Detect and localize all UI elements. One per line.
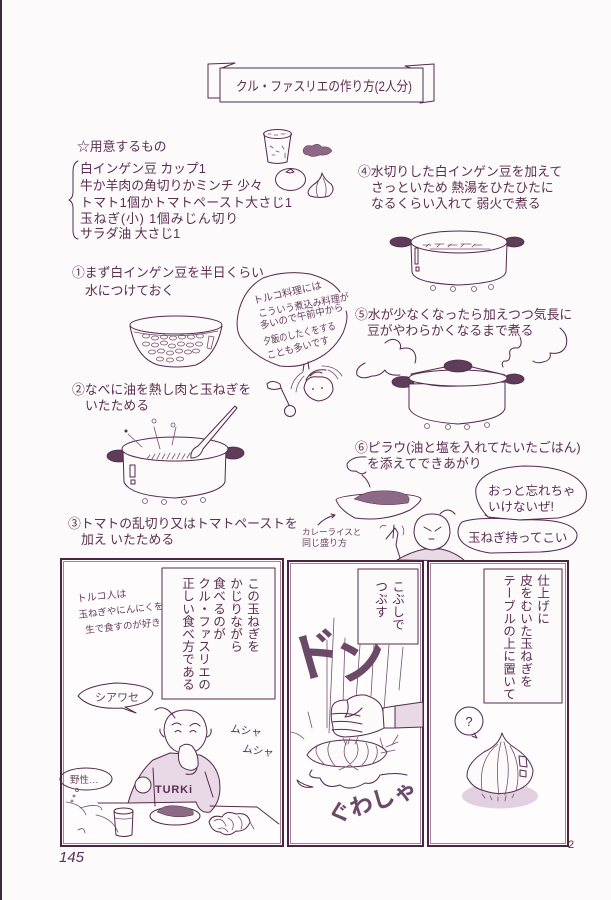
plate of food	[150, 806, 200, 825]
peeled onion	[467, 733, 533, 801]
ingredients heading: ☆用意するもの	[77, 139, 167, 154]
illustration: steam above pilaf	[347, 457, 370, 487]
speech bubble: forgot something: おっと忘れちゃ	[488, 484, 576, 498]
speech bubble: forgot something	[476, 466, 586, 520]
speech bubble: cooking note: こういう煮込み料理が	[257, 290, 350, 320]
caption box: panel 3: 仕上げに	[535, 574, 549, 625]
icon: onion	[308, 173, 333, 198]
step 1 text: ①まず白インゲン豆を半日くらい	[72, 265, 264, 280]
sfx: munch: ムシャ	[242, 743, 274, 759]
illustration: covered pot	[392, 360, 524, 430]
step 6 text: ⑥ピラウ(油と塩を入れてたいたごはん)	[355, 440, 581, 455]
step 3 text	[68, 516, 298, 547]
ingredient list with brace: 玉ねぎ(小) 1個みじん切り	[80, 211, 238, 226]
step 1 text	[72, 265, 264, 298]
step 6 text: を添えてできあがり	[367, 456, 482, 471]
sfx: munch	[230, 723, 274, 759]
illustration: stir-fry pot	[107, 406, 244, 504]
glass of water	[114, 808, 133, 836]
speech bubble: cooking note: トルコ料理には	[252, 279, 323, 307]
bubble: shiawase	[78, 683, 153, 713]
title banner	[208, 63, 434, 103]
question bubble: ?	[465, 714, 473, 729]
caption box: panel 3	[484, 569, 562, 703]
character: man pointing finger	[380, 510, 465, 561]
title banner: クル・ファスリエの作り方(2人分)	[236, 79, 412, 94]
step 3 text: 加え いたためる	[81, 532, 174, 547]
speech bubble: cooking note	[237, 273, 350, 371]
caption box: panel 1: クル・ファスリエの	[196, 577, 210, 691]
table	[98, 803, 279, 824]
caption box: panel 1: 正しい食べ方である	[180, 577, 194, 690]
onion peels	[209, 813, 254, 835]
bubble: shiawase: シアワセ	[95, 691, 139, 704]
icon: ladle	[267, 382, 296, 416]
sfx: don	[283, 621, 391, 693]
step 5 text: ⑤水が少なくなったら加えつつ気長に	[355, 307, 572, 322]
motion lines	[66, 802, 118, 833]
crushed onion	[291, 712, 407, 788]
caption box: panel 2: こぶしで	[390, 580, 404, 631]
note: curry rice plating	[302, 514, 361, 548]
fist and arm	[331, 695, 423, 737]
caption box: panel 2: つぶす	[373, 580, 387, 618]
speech bubble: cooking note: 多いので午前中から	[259, 300, 345, 332]
sfx: don: ン	[331, 628, 391, 693]
caption box: panel 2	[358, 569, 418, 644]
icon: meat cubes	[303, 144, 332, 156]
speech bubble: forgot something: いけないぜ!	[488, 500, 554, 514]
step 4 text: ④水切りした白インゲン豆を加えて	[358, 164, 562, 179]
ingredient list with brace: 白インゲン豆 カップ1	[80, 161, 206, 176]
question bubble	[455, 707, 483, 738]
step 2 text	[72, 382, 251, 413]
speech bubble: cooking note: ことも多いです	[265, 333, 331, 362]
handwritten note: 玉ねぎやにんにくを	[78, 600, 164, 621]
caption box: panel 1: この玉ねぎを	[245, 577, 259, 653]
step 2 text: ②なべに油を熱し肉と玉ねぎを	[72, 382, 251, 397]
illustration: steam left	[357, 339, 416, 378]
step 1 text: 水につけておく	[85, 283, 174, 298]
handwritten note: トルコ人は	[76, 588, 127, 605]
caption box: panel 1	[162, 568, 275, 699]
caption box: panel 3: テーブルの上に置いて	[501, 574, 515, 700]
sfx: munch: ムシャ	[230, 723, 262, 739]
illustration: simmering pot	[390, 231, 524, 292]
bubble: wild	[60, 768, 112, 802]
speech bubble: bring onion	[458, 518, 577, 553]
illustration: bowl of soaking beans	[130, 316, 222, 367]
bubble: wild: 野性…	[70, 774, 99, 786]
icon: tomato	[276, 168, 306, 190]
ingredient list with brace: サラダ油 大さじ1	[80, 226, 180, 241]
step 6 text	[355, 440, 581, 471]
note: curry rice plating: カレーライスと	[302, 527, 361, 537]
ingredient list with brace: 牛か羊肉の角切りかミンチ 少々	[80, 178, 263, 193]
speech bubble: cooking note: 夕飯のしたくをする	[262, 320, 337, 348]
caption box: panel 1: かじりながら	[228, 577, 242, 653]
speed lines	[327, 618, 403, 735]
sfx: crash: ぐわしゃ	[325, 776, 420, 829]
step 4 text	[358, 164, 562, 211]
step 5 text: 豆がやわらかくなるまで煮る	[367, 323, 533, 338]
caption box: panel 3: 皮をむいた玉ねぎを	[518, 574, 532, 687]
speech bubble: bring onion: 玉ねぎ持ってこい	[468, 530, 567, 545]
ingredient list with brace	[69, 161, 292, 241]
character: man eating	[128, 708, 220, 812]
corner number fragment: 2	[568, 839, 574, 851]
ingredient list with brace: トマト1個かトマトペースト大さじ1	[80, 195, 292, 210]
comic panel 1: eating	[60, 559, 283, 846]
illustration: steam right	[502, 328, 567, 367]
step 4 text: さっといため 熱湯をひたひたに	[371, 180, 554, 195]
onion shadow	[462, 784, 538, 808]
step 4 text: なるくらい入れて 弱火で煮る	[371, 196, 541, 211]
handwritten note: 生で食すのが好き	[85, 616, 161, 636]
character: chef face	[291, 366, 342, 401]
page number: 145	[59, 849, 85, 866]
note: curry rice plating: 同じ盛り方	[302, 537, 347, 548]
character: man eating: TURKi	[155, 784, 192, 796]
comic panel 2: crush	[283, 561, 423, 846]
step 2 text: いたためる	[85, 398, 149, 413]
step 3 text: ③トマトの乱切り又はトマトペーストを	[68, 516, 298, 531]
comic panel 3: onion on table	[428, 561, 568, 846]
step 5 text	[355, 307, 572, 338]
handwritten note	[76, 584, 166, 637]
illustration: pilaf plate	[336, 491, 421, 519]
sfx: don: ド	[283, 621, 349, 692]
caption box: panel 1: 食べるのが	[211, 577, 225, 640]
icon: glass of beans	[264, 130, 292, 164]
